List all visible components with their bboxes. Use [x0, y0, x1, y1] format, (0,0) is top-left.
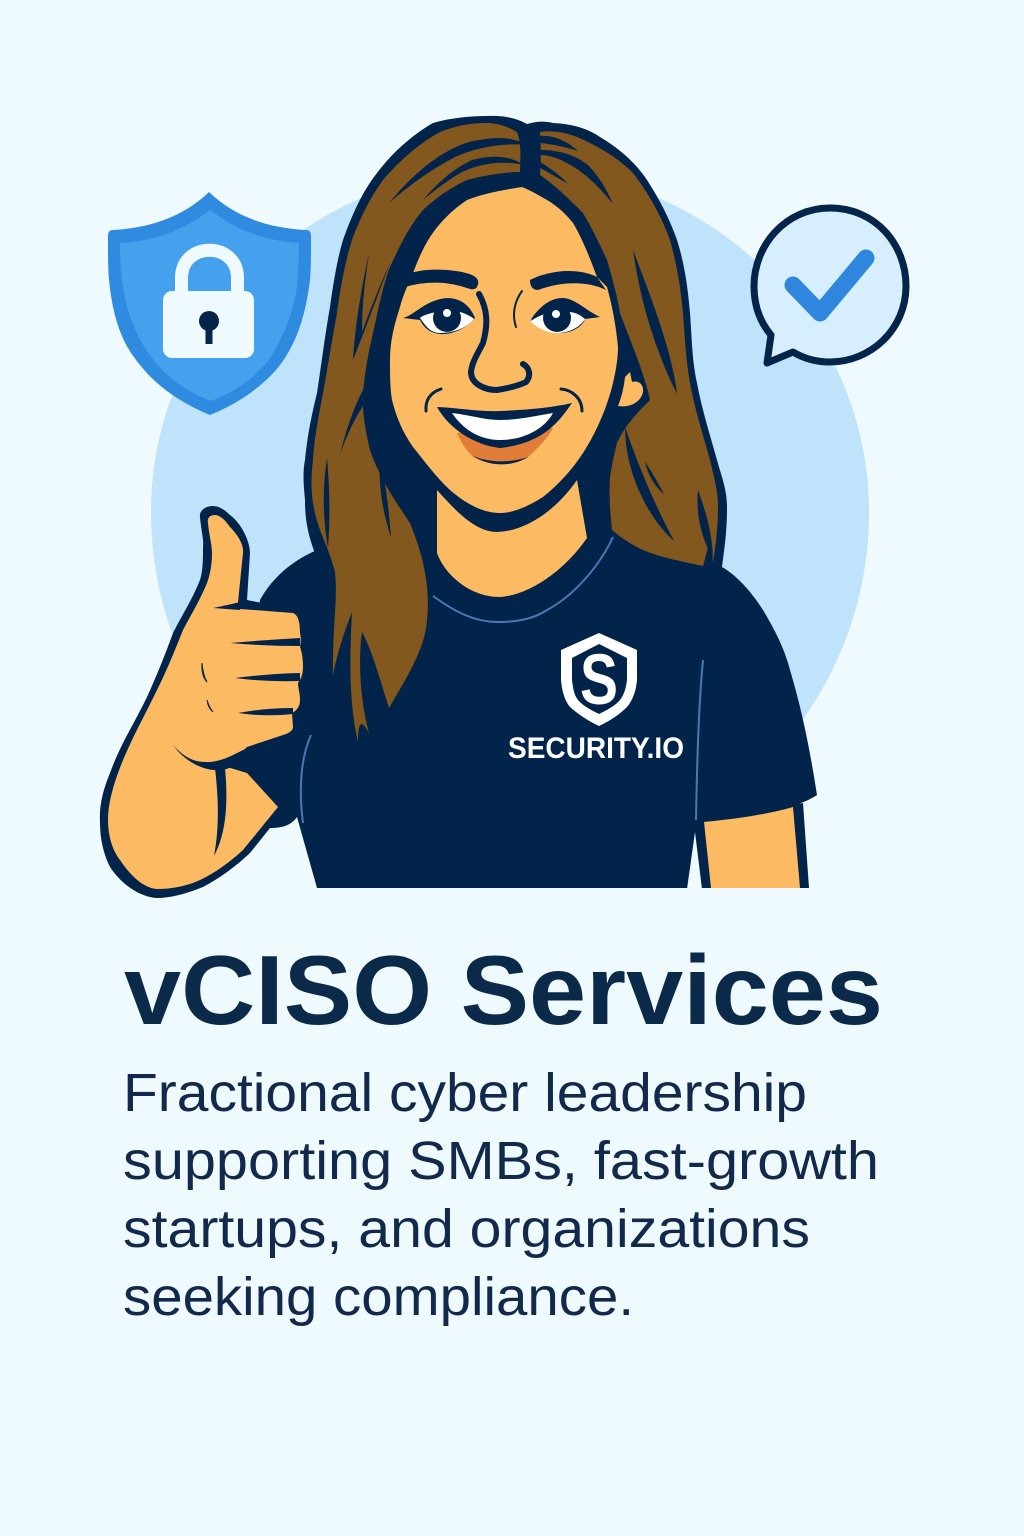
background circle [151, 167, 869, 871]
hair left section [312, 123, 520, 742]
hand [100, 506, 303, 898]
description text: startups, and organizations [123, 1199, 810, 1259]
mouth [437, 403, 572, 464]
icon: shield with padlock [108, 192, 311, 415]
eyebrows [405, 270, 606, 290]
shirt logo: SECURITY.IO [508, 732, 684, 765]
hair silhouette [304, 116, 727, 748]
face [390, 187, 618, 513]
description text [123, 1063, 879, 1327]
hair strand lines [324, 136, 713, 558]
right arm [687, 803, 809, 889]
description text: seeking compliance. [123, 1267, 634, 1327]
title: vCISO Services [124, 935, 883, 1045]
figure: woman giving thumbs up [100, 116, 817, 898]
description text: Fractional cyber leadership [123, 1063, 807, 1123]
shirt [240, 550, 817, 888]
finger lines [173, 602, 300, 856]
shirt logo [508, 633, 684, 765]
shirt logo: S [580, 641, 618, 720]
nose [471, 291, 529, 390]
description text: supporting SMBs, fast-growth [123, 1131, 879, 1191]
eyes [403, 298, 600, 334]
icon: speech bubble with check mark [754, 208, 906, 363]
shirt seam details [301, 537, 703, 823]
neck [437, 480, 587, 597]
ear [618, 372, 643, 406]
hair right section [540, 131, 718, 566]
smile creases [426, 389, 582, 411]
